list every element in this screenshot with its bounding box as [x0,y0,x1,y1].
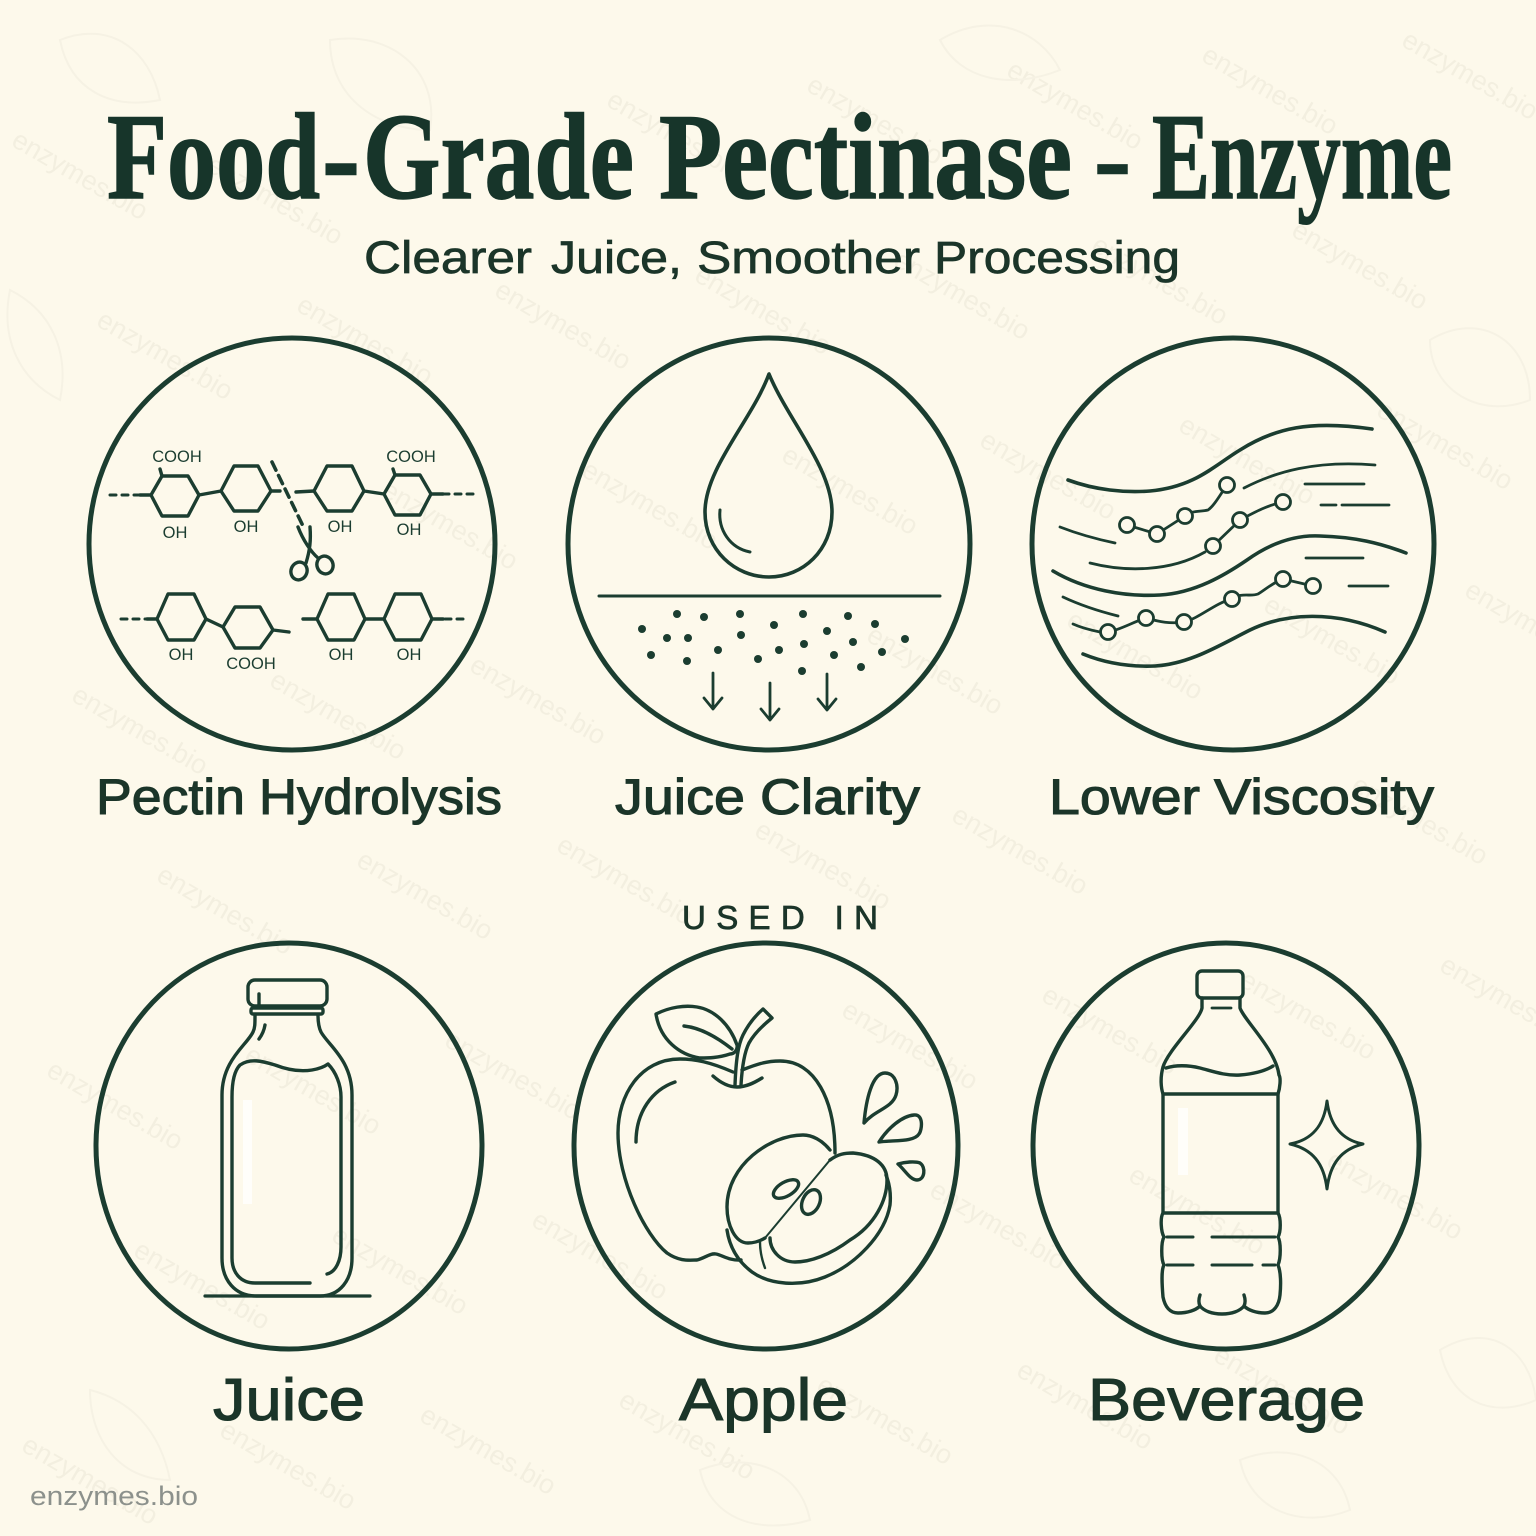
label: lower viscosity: Viscosity [1214,769,1434,825]
icon: pectin chains with scissors: COOH [152,448,202,466]
background watermark pattern: enzymes.bio [215,1414,361,1516]
icon: pectin chains with scissors: COOH [226,655,276,673]
label: lower viscosity: Lower [1049,769,1200,825]
icon: apple with slice and splash [618,1006,924,1283]
background watermark pattern: enzymes.bio [490,274,636,376]
background watermark pattern: enzymes.bio [1287,214,1433,316]
background watermark pattern: enzymes.bio [577,454,723,556]
title: – [1098,88,1128,225]
background watermark pattern: enzymes.bio [1002,54,1148,156]
panel: juice [96,943,482,1433]
panel: beverage [1033,943,1419,1433]
icon: pectin chains with scissors: OH [397,521,421,539]
subtitle: Smoother [697,232,920,283]
background watermark pattern: enzymes.bio [925,1174,1071,1276]
background watermark pattern: enzymes.bio [947,799,1093,901]
subtitle: Processing [934,232,1180,283]
background watermark pattern: enzymes.bio [1259,589,1405,691]
background watermark pattern: enzymes.bio [352,844,498,946]
subtitle [364,232,1180,283]
background watermark pattern: enzymes.bio [440,1024,586,1126]
icon: scissors [288,527,336,582]
arrows: settling particles [704,673,836,720]
label: apple: Apple [679,1367,848,1433]
background watermark pattern: enzymes.bio [1235,964,1381,1066]
background watermark pattern: enzymes.bio [240,1039,386,1141]
background watermark pattern: enzymes.bio [889,244,1035,346]
label: juice clarity: Clarity [760,769,920,825]
background watermark pattern: enzymes.bio [1347,769,1493,871]
icon: pectin chains with scissors: OH [397,646,421,664]
title: Pectinase [659,88,1072,225]
background watermark pattern: enzymes.bio [1012,1354,1158,1456]
background watermark pattern: enzymes.bio [1174,409,1320,511]
label: juice clarity [615,769,920,825]
background watermark pattern: enzymes.bio [415,1399,561,1501]
ring: juice clarity [568,338,970,750]
title: Food [107,88,320,225]
title: - [322,88,360,225]
ring: juice [96,943,482,1349]
ring: lower viscosity [1032,338,1434,750]
background watermark pattern: enzymes.bio [1124,1159,1270,1261]
label: beverage: Beverage [1088,1367,1365,1433]
background watermark pattern: enzymes.bio [1372,394,1518,496]
panel: lower viscosity [1032,338,1434,825]
icon: pectin chains with scissors: OH [328,518,352,536]
background watermark pattern: enzymes.bio [777,439,923,541]
background watermark pattern: enzymes.bio [202,149,348,251]
ring: pectin hydrolysis [89,338,495,750]
background watermark pattern: enzymes.bio [7,124,153,226]
background watermark pattern: enzymes.bio [1062,604,1208,706]
panel: apple [574,943,958,1433]
background watermark pattern: enzymes.bio [92,304,238,406]
background watermark pattern: enzymes.bio [602,84,748,186]
title [107,88,1452,225]
icon: juice drop over filter with particles [599,374,940,720]
background watermark pattern: enzymes.bio [862,619,1008,721]
icon: juice bottle [205,980,370,1296]
title: Grade [363,88,634,225]
background watermark pattern: enzymes.bio [802,69,948,171]
label: lower viscosity [1049,769,1434,825]
label: pectin hydrolysis: Hydrolysis [259,769,502,825]
background watermark pattern: enzymes.bio [465,649,611,751]
background watermark pattern: enzymes.bio [812,1369,958,1471]
background watermark pattern: enzymes.bio [750,814,896,916]
background watermark pattern: enzymes.bio [17,1429,163,1531]
heading: used in: USED IN [682,899,878,936]
icon: pectin chains with scissors: COOH [386,448,436,466]
background watermark pattern: enzymes.bio [327,1219,473,1321]
background watermark pattern: enzymes.bio [42,1054,188,1156]
subtitle: Juice, [551,232,682,283]
background watermark pattern: enzymes.bio [292,289,438,391]
background watermark pattern: enzymes.bio [527,1204,673,1306]
ring: beverage [1033,943,1419,1349]
icon: pectin chains with scissors: OH [234,518,258,536]
icon: flowing streams with molecules [1053,425,1406,666]
background watermark pattern: enzymes.bio [377,474,523,576]
subtitle: Clearer [364,232,532,283]
icon: beverage bottle with sparkle [1161,971,1363,1314]
label: juice: Juice [213,1367,365,1433]
background watermark pattern: enzymes.bio [1322,1144,1468,1246]
background watermark pattern: enzymes.bio [265,664,411,766]
background watermark pattern: enzymes.bio [690,259,836,361]
icon: pectin chains with scissors: OH [329,646,353,664]
label: pectin hydrolysis: Pectin [96,769,245,825]
icon: pectin chains with scissors: OH [169,646,193,664]
label: juice clarity: Juice [615,769,745,825]
background watermark pattern: enzymes.bio [975,424,1121,526]
background watermark pattern: enzymes.bio [67,679,213,781]
panel: juice clarity [568,338,970,825]
ring: apple [574,943,958,1349]
background watermark pattern: enzymes.bio [614,1384,760,1486]
background watermark pattern: enzymes.bio [1209,1339,1355,1441]
label: pectin hydrolysis [96,769,502,825]
background watermark pattern: enzymes.bio [552,829,698,931]
icon: pectin chains with scissors: OH [163,524,187,542]
background watermark pattern: enzymes.bio [1087,229,1233,331]
background watermark pattern: enzymes.bio [129,1234,275,1336]
background watermark pattern: enzymes.bio [1037,979,1183,1081]
icon: pectin chains with scissors [110,448,476,673]
brand watermark: enzymes.bio [30,1481,198,1511]
panel: pectin hydrolysis [89,338,502,825]
background watermark pattern: enzymes.bio [152,859,298,961]
background watermark pattern: enzymes.bio [1197,39,1343,141]
background watermark pattern: enzymes.bio [837,994,983,1096]
